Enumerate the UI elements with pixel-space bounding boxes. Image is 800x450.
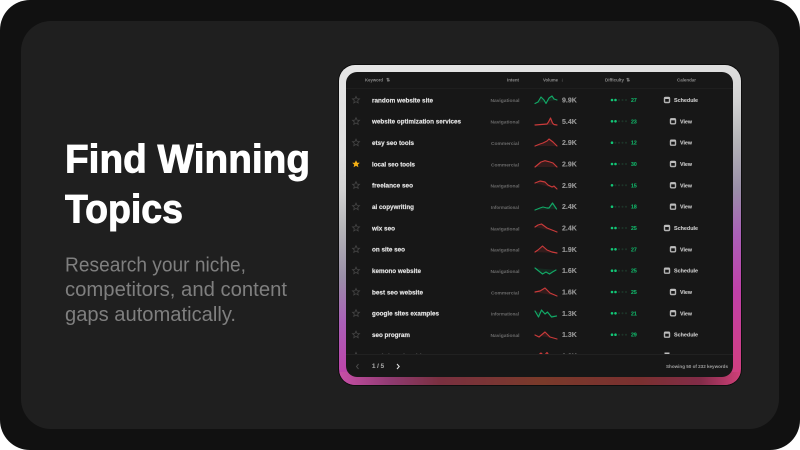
keyword count: Showing 50 of 232 keywords — [666, 364, 728, 370]
subtitle text — [65, 254, 287, 326]
row: local seo tools: Commercial — [491, 162, 520, 168]
row: website optimization services: 5.4K — [562, 119, 577, 126]
row: local seo tools: local seo tools — [372, 161, 415, 168]
row: seo program: Navigational — [490, 333, 520, 339]
row: local seo tools: 2.9K — [562, 162, 577, 168]
subtitle text: competitors, and content — [65, 279, 287, 301]
icon: next page chevron — [397, 364, 399, 369]
title: Find Winning — [65, 138, 310, 182]
row: wix seo: 25 — [631, 226, 637, 232]
row: random website site: Navigational — [490, 98, 520, 104]
row: partially hidden keyword: web hosting kit — [371, 353, 425, 360]
row: kemono website: Navigational — [490, 269, 520, 275]
table header: Intent — [507, 78, 519, 84]
row: freelance seo: 2.9K — [562, 183, 577, 190]
subtitle text: gaps automatically. — [65, 304, 236, 326]
row: on site seo — [352, 246, 693, 254]
row: etsy seo tools: Commercial — [491, 141, 520, 147]
table header: Volume — [543, 78, 558, 84]
row: seo program: seo program — [372, 332, 410, 339]
row: random website site: 27 — [631, 98, 637, 104]
row: etsy seo tools — [352, 139, 693, 147]
row: random website site: 9.9K — [562, 98, 577, 104]
row: ai copywriting: ai copywriting — [372, 204, 414, 211]
row: freelance seo — [352, 181, 693, 190]
row: website optimization services: 23 — [631, 119, 637, 125]
row: wix seo: Navigational — [490, 226, 520, 232]
row: freelance seo: View — [680, 183, 693, 189]
row: kemono website: 1.6K — [562, 268, 577, 275]
row: etsy seo tools: 12 — [631, 141, 637, 147]
table header: ⇅ — [626, 76, 631, 84]
table header: Calendar — [677, 78, 696, 84]
row: website optimization services: View — [680, 119, 693, 125]
icon: previous page chevron — [356, 364, 358, 369]
row: website optimization services: website optimization services — [371, 118, 461, 126]
row: kemono website: kemono website — [372, 268, 421, 275]
row: freelance seo: Navigational — [490, 184, 520, 190]
row: ai copywriting: View — [680, 205, 693, 211]
row: on site seo: 1.9K — [562, 247, 577, 254]
row: partially hidden keyword — [355, 352, 670, 354]
row: website optimization services: Navigational — [490, 120, 520, 126]
row: google sites examples: Informational — [491, 312, 520, 318]
row: on site seo: Navigational — [490, 248, 520, 254]
title: Topics — [65, 188, 183, 232]
row: google sites examples: 21 — [631, 311, 637, 317]
table header: Difficulty — [605, 78, 624, 84]
title — [65, 138, 310, 232]
row: wix seo — [352, 224, 698, 232]
gradient border — [338, 64, 742, 386]
row: kemono website: 25 — [631, 269, 637, 275]
row: wix seo: wix seo — [371, 225, 395, 232]
row: best seo website: best seo website — [372, 289, 423, 296]
row: partially hidden keyword: 1.2K — [562, 354, 577, 360]
table header — [346, 76, 733, 89]
row: google sites examples: google sites examples — [372, 310, 439, 318]
table rows — [352, 96, 698, 360]
row: on site seo: 27 — [631, 247, 637, 253]
row: best seo website: 25 — [631, 290, 637, 296]
panel: keyword table — [338, 64, 742, 386]
page indicator: 1 / 5 — [372, 363, 385, 370]
row: wix seo: 2.4K — [562, 226, 577, 232]
row: seo program: Schedule — [674, 333, 698, 339]
row: website optimization services — [352, 118, 693, 126]
row: on site seo: View — [680, 247, 693, 253]
row: kemono website — [352, 267, 698, 275]
row: google sites examples: 1.3K — [562, 311, 577, 318]
row: etsy seo tools: etsy seo tools — [372, 140, 414, 147]
row: best seo website: 1.6K — [562, 290, 577, 296]
table footer — [346, 354, 733, 370]
row: freelance seo: 15 — [631, 183, 637, 189]
row: random website site: Schedule — [674, 98, 698, 104]
row: wix seo: Schedule — [674, 226, 698, 232]
row: google sites examples — [352, 310, 693, 318]
row: partially hidden keyword: Schedule — [674, 354, 698, 360]
row: local seo tools: 30 — [631, 162, 637, 168]
row: best seo website: View — [680, 290, 693, 296]
subtitle text: Research your niche, — [65, 254, 246, 276]
row: random website site: random website site — [372, 97, 433, 104]
table background — [346, 72, 733, 377]
row: etsy seo tools: 2.9K — [562, 140, 577, 147]
row: on site seo: on site seo — [372, 246, 405, 254]
row: local seo tools: View — [680, 162, 693, 168]
table header: Keyword — [365, 78, 383, 84]
row: ai copywriting: Informational — [491, 205, 520, 211]
row: ai copywriting: 2.4K — [562, 204, 577, 211]
row: random website site — [352, 96, 698, 104]
row: freelance seo: freelance seo — [372, 182, 413, 190]
row: best seo website: Commercial — [491, 290, 520, 296]
table header: ⇅ — [386, 76, 391, 84]
row: seo program — [352, 331, 698, 339]
row: ai copywriting: 18 — [631, 205, 637, 211]
row: google sites examples: View — [680, 311, 693, 317]
row: seo program: 1.3K — [562, 332, 577, 339]
row: kemono website: Schedule — [674, 269, 698, 275]
row: best seo website — [352, 288, 693, 296]
row: local seo tools — [352, 160, 693, 168]
row: seo program: 29 — [631, 333, 637, 339]
row: etsy seo tools: View — [680, 141, 693, 147]
row: ai copywriting — [352, 203, 693, 211]
table header: ↓ — [561, 78, 563, 84]
